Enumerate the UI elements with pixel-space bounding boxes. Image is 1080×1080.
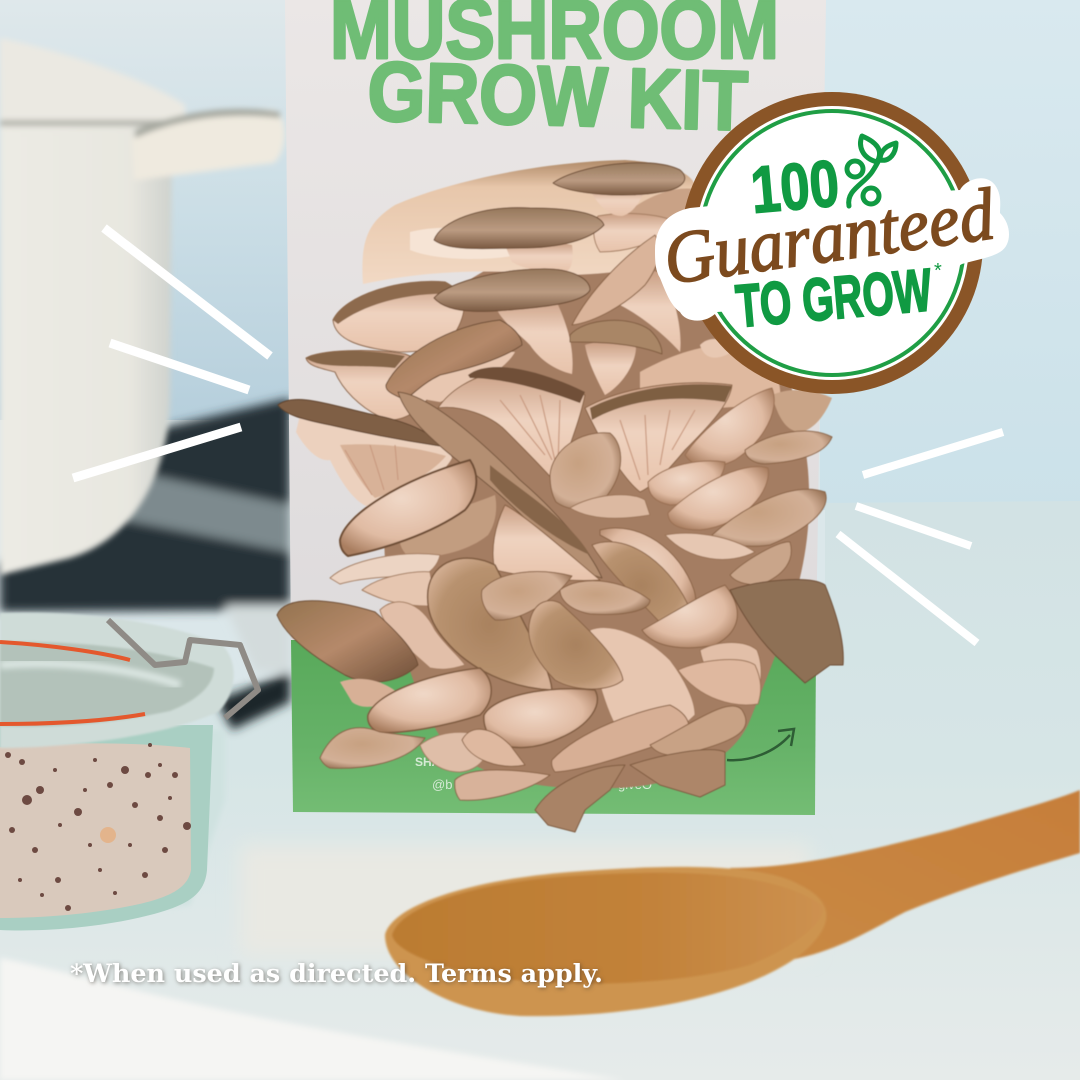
back right caps [620, 188, 705, 257]
badge ring [681, 92, 983, 394]
box title: GROW KIT [367, 44, 749, 148]
metal clip [108, 620, 258, 718]
asterisk: * [934, 260, 942, 282]
box front panel [285, 0, 826, 640]
left mid cap [399, 495, 496, 558]
mushroom cluster [277, 160, 843, 832]
100 text: 100 [748, 146, 842, 227]
stove [0, 398, 290, 730]
footnote: *When used as directed. Terms apply. [70, 959, 603, 988]
salt speckles [5, 743, 191, 911]
round cap centre [550, 433, 621, 509]
red rubber seal [0, 642, 145, 724]
jar rim [0, 613, 234, 748]
box base text: @b [432, 777, 452, 792]
left gilled caps [333, 281, 464, 352]
large gilled caps [438, 370, 585, 482]
box green base [291, 640, 816, 815]
central caps [505, 243, 573, 272]
lower big caps [600, 528, 696, 630]
jar shadow [0, 730, 225, 925]
script band [655, 178, 1009, 321]
spoon handle [730, 790, 1080, 960]
spoon bowl [385, 867, 826, 1016]
Guaranteed script: Guaranteed [659, 173, 1000, 301]
radiating lines right [838, 432, 1003, 643]
foreground counter edge [0, 958, 625, 1080]
wooden spoon [385, 790, 1080, 1016]
radiating lines left [73, 228, 270, 478]
box base text: giveO [618, 777, 652, 792]
icon: smile arrow [727, 729, 794, 760]
mid caps [400, 352, 515, 402]
icon: percent sprout [847, 136, 896, 206]
salt contents [0, 743, 191, 918]
box base text: SHAR [415, 755, 449, 769]
product box [285, 0, 826, 815]
small central cap [585, 342, 636, 395]
diagonal stem caps [398, 392, 602, 578]
guarantee badge [655, 92, 1009, 394]
cooking pot [0, 38, 285, 575]
box title [330, 0, 779, 148]
salt jar [0, 613, 258, 930]
box base text [415, 755, 652, 792]
gill texture [345, 395, 695, 495]
block substrate [362, 160, 695, 284]
jar body glass [0, 725, 213, 930]
TO GROW text: TO GROW [733, 256, 935, 340]
cluster mass [384, 208, 809, 788]
